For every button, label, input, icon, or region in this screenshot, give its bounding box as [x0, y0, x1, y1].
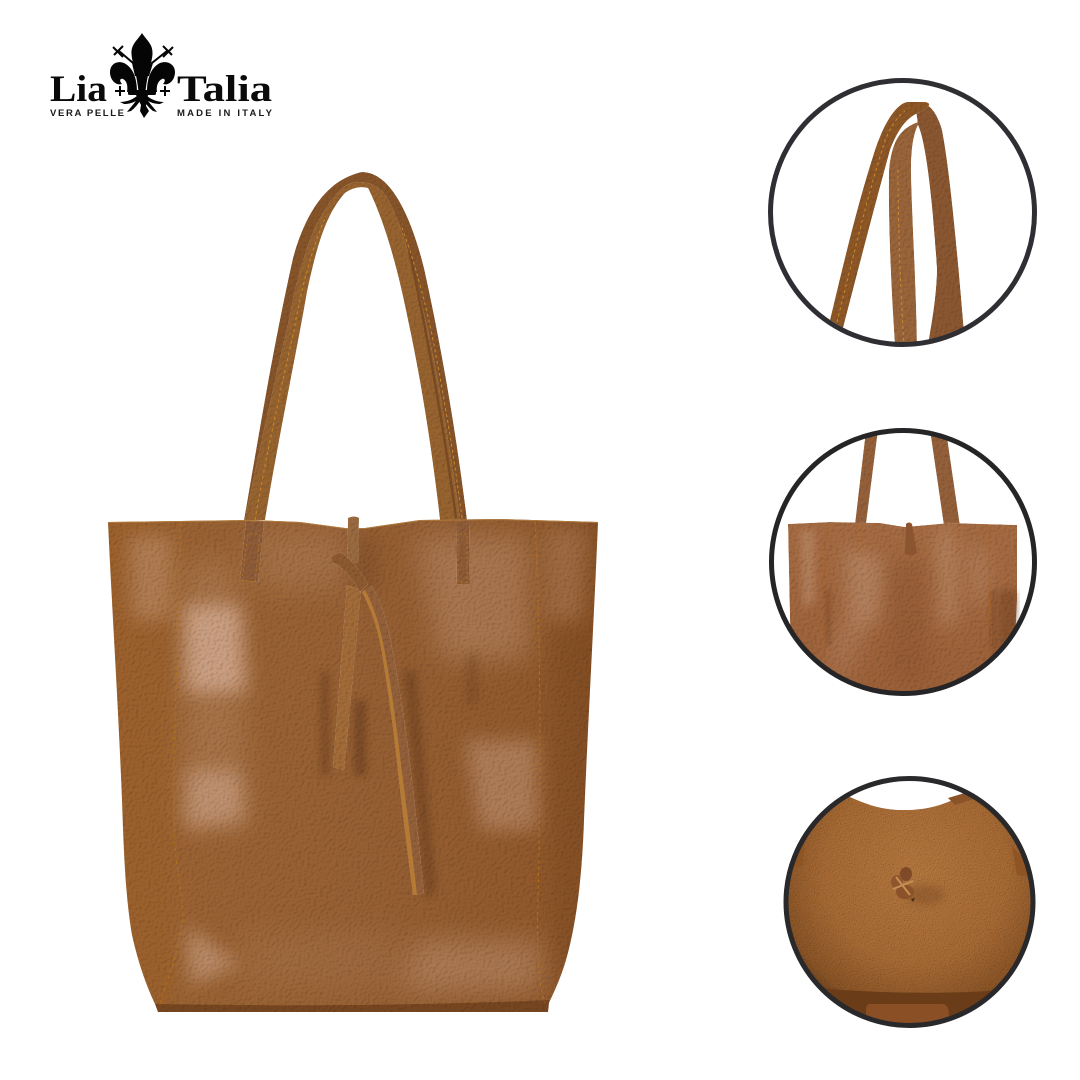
logo wordmark right: Talia — [177, 69, 272, 110]
detail circle: handles — [770, 80, 1034, 345]
strap stitching — [837, 111, 905, 345]
main product: leather tote bag — [100, 172, 610, 1020]
top rim lining — [108, 519, 598, 528]
side seams stitching — [160, 522, 545, 1003]
inner pocket patch — [866, 1004, 949, 1023]
bag body — [100, 510, 610, 1020]
suede lining — [788, 797, 1030, 993]
handle stitching — [255, 216, 462, 520]
inner bottom — [826, 988, 992, 1016]
circle outline — [770, 80, 1034, 344]
suede knot — [891, 867, 915, 902]
detail circle: bag opening — [772, 430, 1034, 700]
close-up seams and tabs — [822, 524, 992, 650]
close-up straps — [855, 430, 960, 526]
logo wordmark left: Lia — [50, 69, 107, 110]
middle strap — [889, 122, 918, 345]
circle outline — [786, 778, 1033, 1026]
tie strap left tail — [333, 585, 361, 770]
logo tagline right: MADE IN ITALY — [177, 108, 273, 119]
logo: Lia Talia — [50, 33, 273, 119]
detail circle: suede interior — [784, 776, 1036, 1028]
logo tagline left: VERA PELLE — [50, 108, 124, 119]
tie strap knot — [332, 516, 368, 592]
side straps — [794, 842, 1028, 876]
handle attachment tabs — [240, 522, 470, 584]
left strap — [830, 102, 929, 328]
right strap — [915, 102, 964, 345]
circle outline — [772, 430, 1034, 694]
icon: fleur-de-lis — [110, 33, 175, 118]
handle groove shading — [409, 250, 456, 518]
close-up loop tab — [905, 522, 917, 555]
base fold — [155, 1000, 549, 1012]
back handle — [244, 172, 467, 520]
leather highlights — [128, 528, 590, 992]
knot shadow — [905, 885, 945, 905]
tie strap long tail — [362, 586, 424, 895]
top right strap — [948, 794, 973, 805]
front handle — [245, 182, 460, 520]
leather shadows — [321, 533, 598, 990]
close-up body — [788, 522, 1017, 700]
